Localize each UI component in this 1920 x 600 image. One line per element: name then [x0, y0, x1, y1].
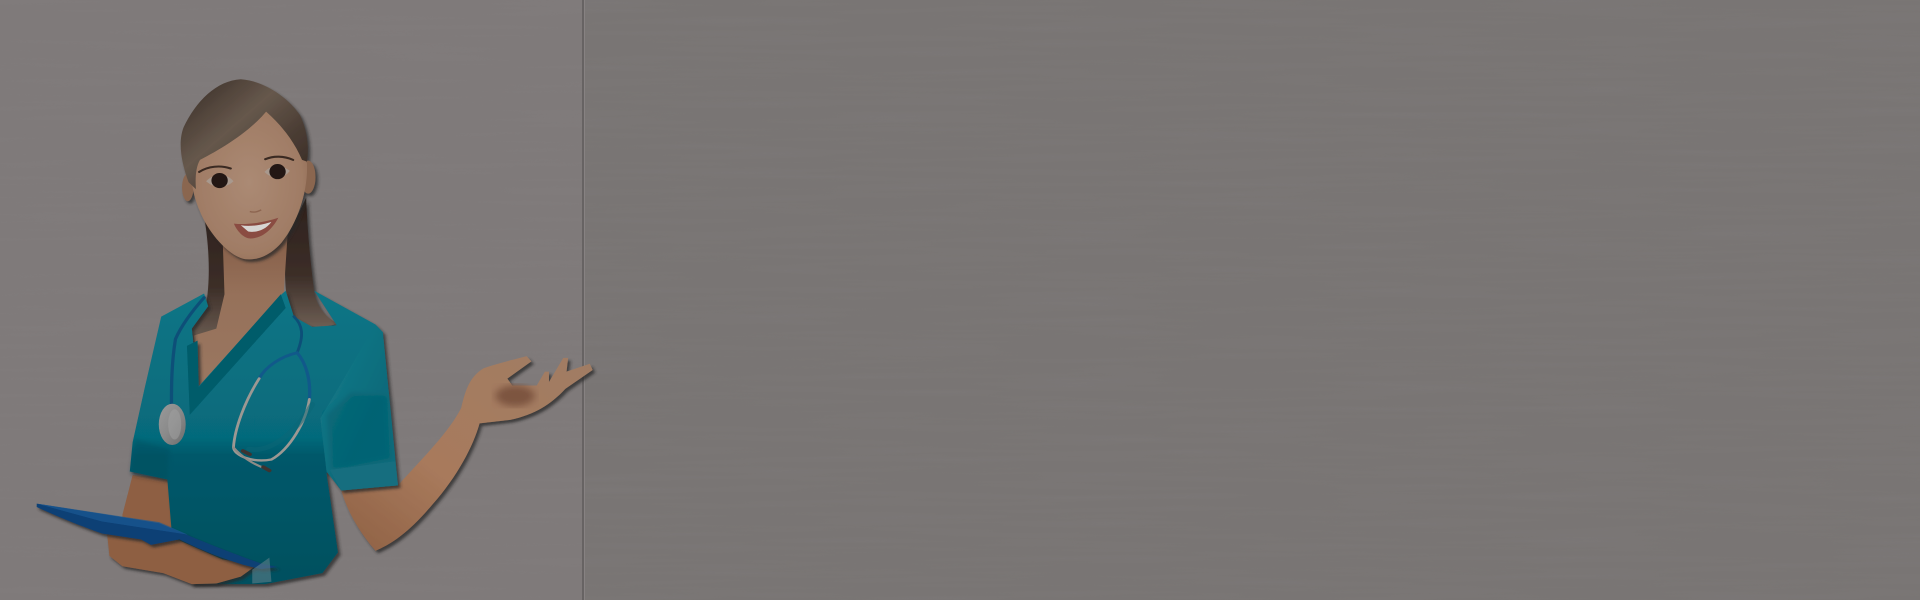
forearm and hand holding clipboard — [107, 532, 257, 584]
right ear — [301, 161, 316, 194]
sleeve cuff — [330, 461, 398, 491]
hair strands behind — [171, 198, 338, 342]
stethoscope chest piece — [159, 404, 186, 445]
nose — [250, 210, 261, 212]
face — [191, 105, 307, 259]
neck — [194, 232, 288, 391]
clipboard clip strip — [252, 558, 271, 583]
scrub top — [130, 291, 398, 584]
V-neck collar — [187, 294, 286, 415]
head — [181, 79, 316, 259]
eyebrows — [199, 157, 293, 172]
left upper arm — [122, 475, 171, 542]
left ear — [182, 174, 193, 201]
stethoscope — [171, 298, 312, 471]
clipboard — [37, 504, 278, 569]
palm shading — [496, 385, 535, 406]
mouth — [234, 218, 278, 238]
right arm and open hand — [341, 356, 593, 551]
sleeve — [320, 324, 398, 491]
background: left panel — [0, 0, 583, 600]
hair cap — [181, 79, 308, 189]
vertical divider — [582, 0, 585, 600]
eyes — [206, 164, 290, 188]
nurse illustration — [37, 79, 593, 584]
